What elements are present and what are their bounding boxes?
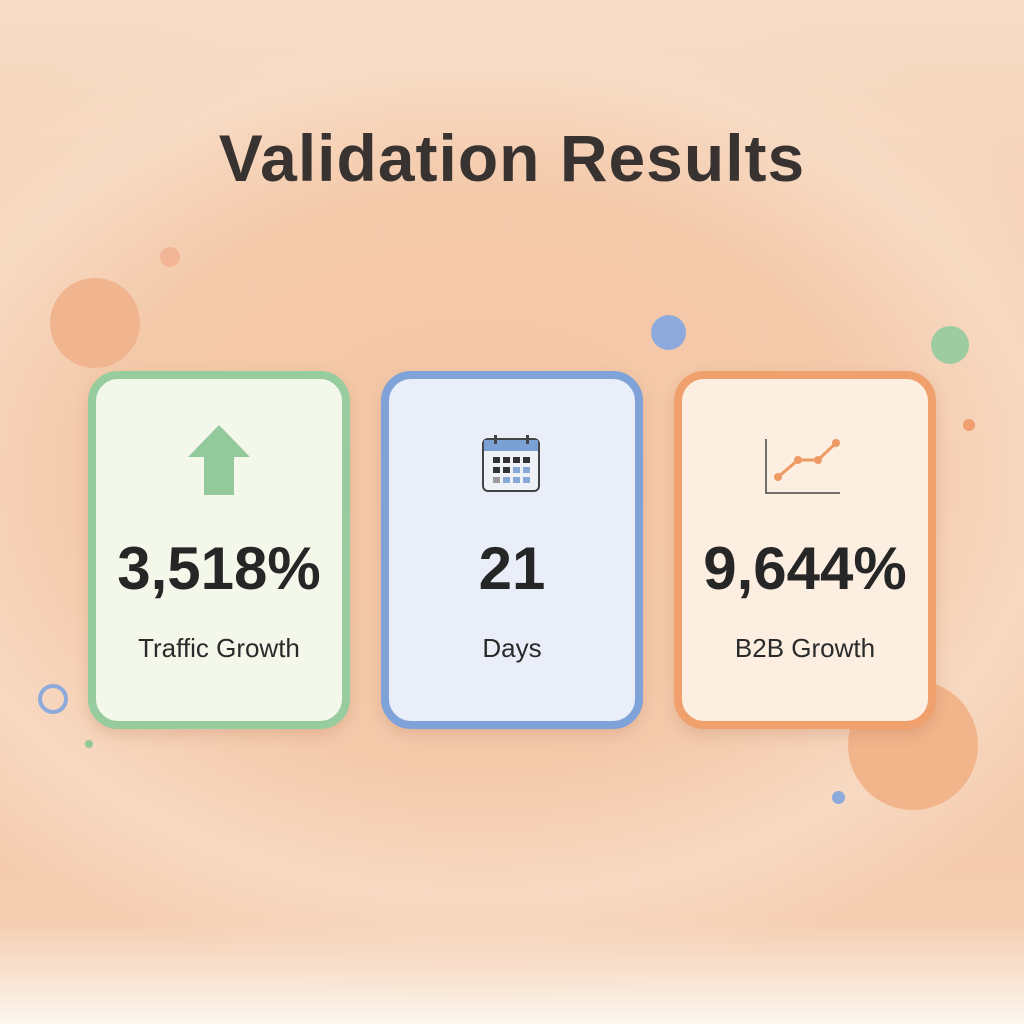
icon: calendar <box>482 435 540 492</box>
value: 9,644% <box>703 535 907 602</box>
panel: days <box>381 371 643 729</box>
value: 3,518% <box>117 535 321 602</box>
panel: traffic growth <box>88 371 350 729</box>
value: 21 <box>479 535 545 602</box>
panel: b2b growth <box>674 371 936 729</box>
label: Traffic Growth <box>138 633 300 663</box>
icon: up arrow <box>188 425 250 495</box>
label: Days <box>482 633 542 663</box>
title: Validation Results <box>219 121 805 195</box>
label: B2B Growth <box>735 633 875 663</box>
icon: line chart <box>765 439 840 494</box>
